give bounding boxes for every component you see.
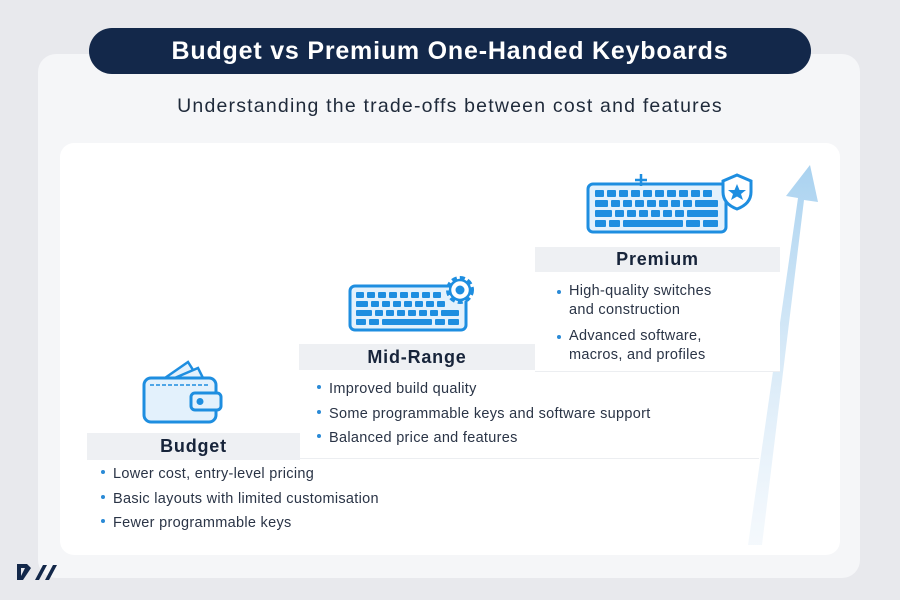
budget heading: Budget bbox=[160, 436, 227, 456]
premium bullets: and construction bbox=[569, 302, 680, 318]
inner panel bbox=[60, 143, 840, 555]
step: budget bbox=[87, 433, 379, 531]
mid-range bullets: Balanced price and features bbox=[329, 430, 518, 446]
budget bullets: Lower cost, entry-level pricing bbox=[113, 466, 314, 482]
arrow: growth bbox=[748, 165, 818, 545]
logo bbox=[17, 564, 57, 580]
step: mid-range bbox=[299, 344, 759, 459]
mid-range heading: Mid-Range bbox=[367, 347, 467, 367]
premium bullets: High-quality switches bbox=[569, 283, 712, 299]
outer card bbox=[38, 54, 860, 578]
premium bullets: Advanced software, bbox=[569, 328, 702, 344]
premium bullets bbox=[557, 283, 712, 363]
mid-range heading bbox=[299, 344, 535, 370]
mid-range bullets: Improved build quality bbox=[329, 381, 477, 397]
budget heading bbox=[87, 433, 300, 460]
title bbox=[89, 28, 811, 74]
premium heading bbox=[535, 247, 780, 272]
budget bullets: Fewer programmable keys bbox=[113, 515, 292, 531]
premium heading: Premium bbox=[616, 249, 699, 269]
subtitle: Understanding the trade-offs between cost and features bbox=[177, 95, 723, 117]
title: Budget vs Premium One-Handed Keyboards bbox=[172, 37, 728, 65]
mid-range bullets: Some programmable keys and software support bbox=[329, 406, 651, 422]
budget bullets: Basic layouts with limited customisation bbox=[113, 490, 379, 506]
step: premium bbox=[535, 247, 780, 372]
mid-range bullets bbox=[317, 381, 651, 446]
budget bullets bbox=[101, 466, 379, 531]
icon: keyboard with gear bbox=[348, 276, 474, 332]
premium bullets: macros, and profiles bbox=[569, 347, 706, 363]
icon: premium keyboard with shield bbox=[586, 173, 752, 234]
icon: wallet bbox=[142, 360, 222, 424]
